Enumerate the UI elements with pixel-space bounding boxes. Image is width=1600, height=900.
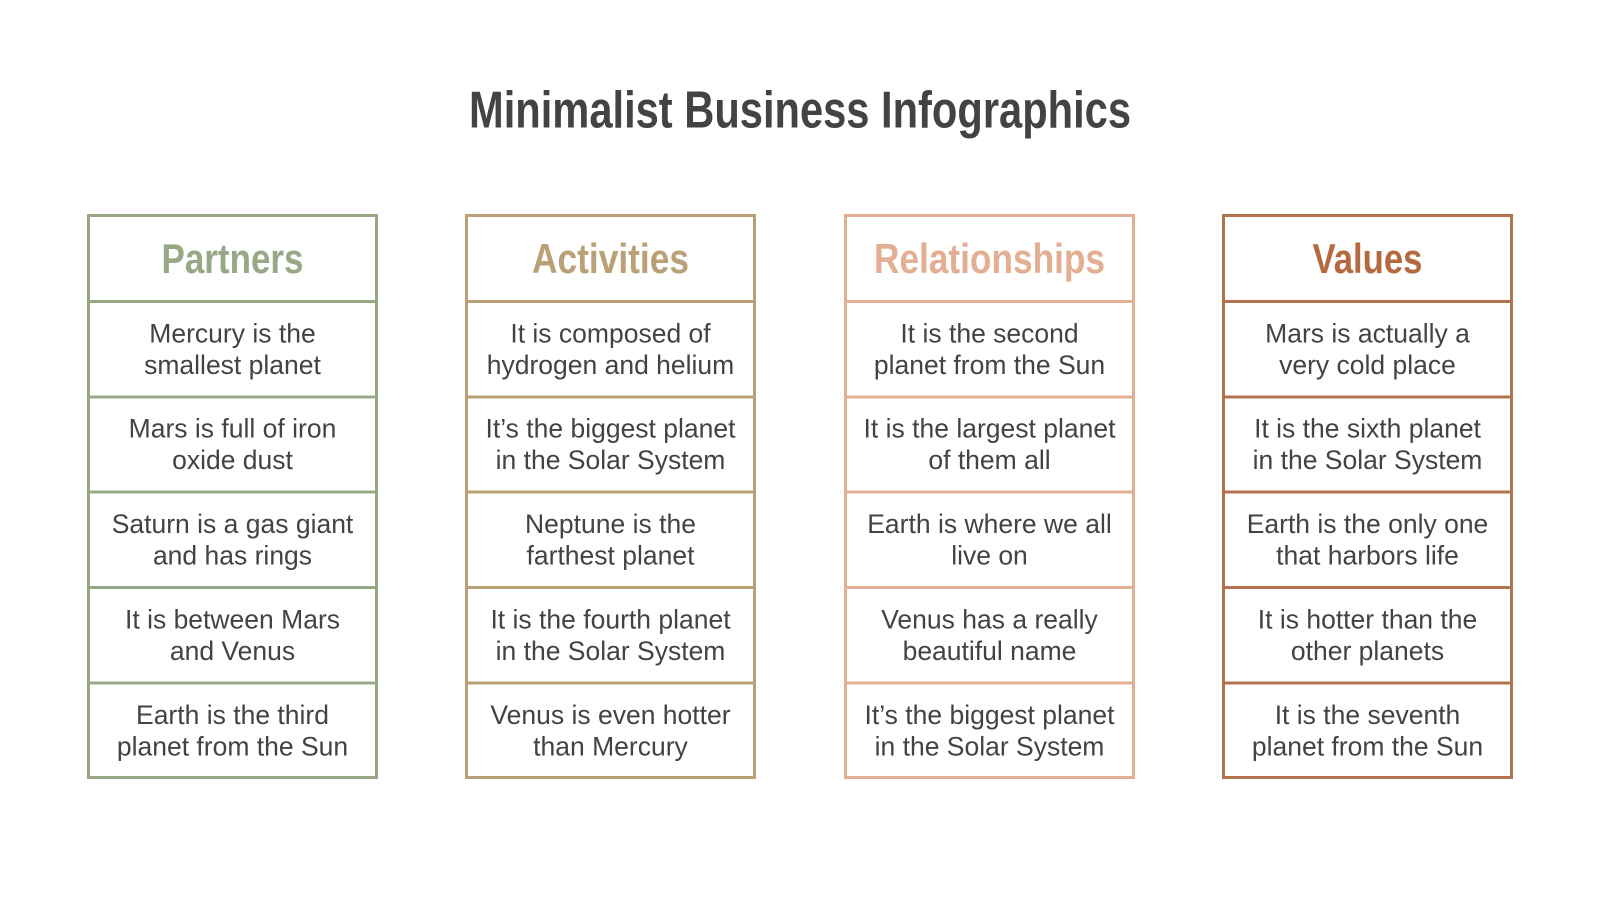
cell: Relationships 2	[864, 414, 1116, 475]
cell: Relationships 1: planet from the Sun	[874, 350, 1105, 380]
heading: Relationships: Relationships	[874, 235, 1105, 282]
cell: Values 3: that harbors life	[1276, 540, 1459, 570]
table frame: Activities	[466, 216, 754, 778]
cell: Values 4: other planets	[1291, 636, 1444, 666]
cell: Values 2: in the Solar System	[1253, 445, 1482, 475]
title: Minimalist Business Infographics	[469, 82, 1131, 140]
cell: Activities 5: Venus is even hotter	[490, 700, 731, 730]
panel: Partners	[88, 216, 376, 778]
cell: Relationships 2: of them all	[928, 445, 1051, 475]
cell: Values 4	[1258, 604, 1477, 666]
cell: Values 3	[1247, 509, 1488, 570]
cell: Activities 2	[486, 414, 736, 475]
cell: Activities 3: Neptune is the	[525, 509, 696, 539]
cell: Partners 1: smallest planet	[144, 350, 322, 380]
cell: Activities 4	[490, 604, 731, 666]
cell: Partners 3	[112, 509, 354, 570]
cell: Activities 3	[525, 509, 696, 570]
cell: Activities 3: farthest planet	[527, 540, 695, 570]
cell: Activities 4: It is the fourth planet	[490, 604, 731, 634]
panel: Relationships	[846, 216, 1134, 778]
cell: Values 2: It is the sixth planet	[1254, 414, 1482, 444]
cell: Values 1	[1265, 318, 1470, 380]
cell: Relationships 5	[865, 700, 1115, 762]
cell: Partners 3: and has rings	[153, 540, 312, 570]
cell: Partners 5: planet from the Sun	[117, 732, 348, 762]
cell: Relationships 3: Earth is where we all	[867, 509, 1112, 539]
panel: Values	[1224, 216, 1512, 778]
cell: Values 3: Earth is the only one	[1247, 509, 1488, 539]
cell: Activities 5	[490, 700, 731, 762]
cell: Partners 2	[129, 414, 336, 475]
cell: Activities 1: hydrogen and helium	[487, 350, 734, 380]
cell: Activities 2: in the Solar System	[496, 445, 725, 475]
cell: Partners 2: oxide dust	[172, 445, 294, 475]
cell: Activities 1: It is composed of	[510, 318, 711, 348]
table frame: Partners	[88, 216, 376, 778]
cell: Relationships 2: It is the largest planet	[864, 414, 1116, 444]
heading: Values: Values	[1312, 235, 1422, 282]
cell: Values 1: very cold place	[1279, 350, 1456, 380]
cell: Values 2	[1253, 414, 1482, 475]
cell: Partners 4: and Venus	[170, 636, 295, 666]
cell: Activities 1	[487, 318, 734, 380]
cell: Relationships 4	[881, 604, 1099, 666]
cell: Partners 5: Earth is the third	[136, 700, 329, 730]
cell: Partners 4: It is between Mars	[125, 604, 340, 634]
cell: Relationships 3: live on	[951, 540, 1028, 570]
cell: Values 5: It is the seventh	[1275, 700, 1460, 730]
panel: Activities	[466, 216, 754, 778]
cell: Partners 2: Mars is full of iron	[129, 414, 336, 444]
cell: Relationships 4: Venus has a really	[881, 604, 1099, 634]
table frame: Relationships	[846, 216, 1134, 778]
cell: Relationships 5: in the Solar System	[875, 732, 1104, 762]
cell: Relationships 3	[867, 509, 1112, 570]
cell: Partners 1: Mercury is the	[149, 318, 316, 348]
cell: Partners 3: Saturn is a gas giant	[112, 509, 354, 539]
cell: Partners 1	[144, 318, 322, 380]
heading: Activities: Activities	[532, 235, 689, 282]
cell: Values 5	[1252, 700, 1483, 762]
cell: Relationships 1: It is the second	[900, 318, 1079, 348]
cell: Activities 5: than Mercury	[533, 732, 689, 762]
table frame: Values	[1224, 216, 1512, 778]
cell: Values 1: Mars is actually a	[1265, 318, 1470, 348]
cell: Values 5: planet from the Sun	[1252, 732, 1483, 762]
cell: Relationships 4: beautiful name	[903, 636, 1076, 666]
cell: Values 4: It is hotter than the	[1258, 604, 1477, 634]
cell: Partners 5	[117, 700, 348, 762]
cell: Relationships 5: It’s the biggest planet	[865, 700, 1115, 730]
cell: Activities 4: in the Solar System	[496, 636, 725, 666]
heading: Partners: Partners	[162, 235, 304, 282]
cell: Activities 2: It’s the biggest planet	[486, 414, 736, 444]
cell: Partners 4	[125, 604, 340, 666]
cell: Relationships 1	[874, 318, 1105, 380]
